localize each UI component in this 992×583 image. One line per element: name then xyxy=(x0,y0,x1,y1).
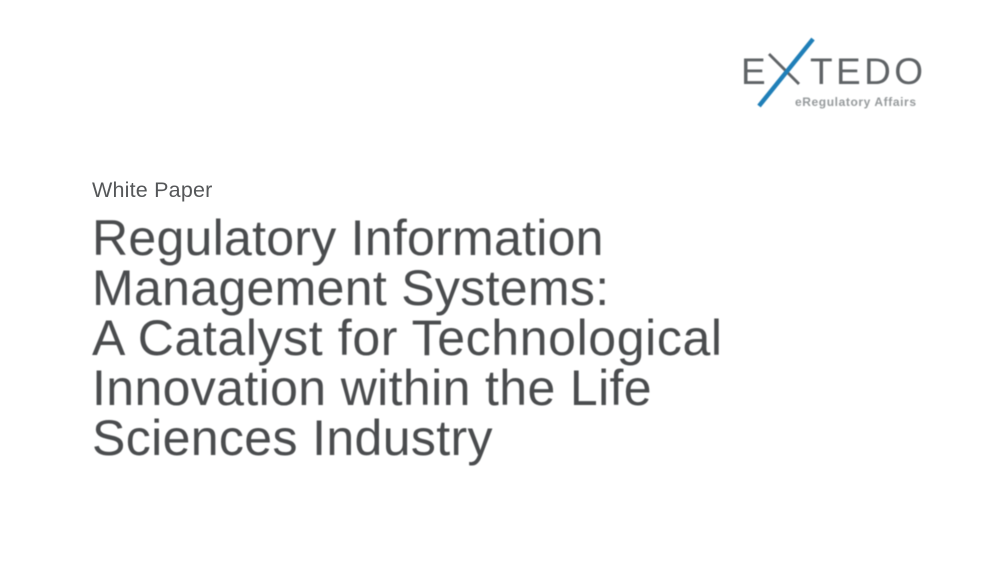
label: White Paper: White Paper xyxy=(92,178,213,202)
title xyxy=(92,210,723,466)
logo tagline: eRegulatory Affairs xyxy=(795,95,916,109)
logo: EXTEDO eRegulatory Affairs xyxy=(741,37,923,109)
title: Innovation within the Life xyxy=(92,360,652,416)
title: Sciences Industry xyxy=(92,410,493,466)
logo X mark xyxy=(759,39,813,106)
title: Regulatory Information xyxy=(92,210,604,266)
title: A Catalyst for Technological xyxy=(92,310,723,366)
logo wordmark letters xyxy=(741,51,923,92)
logo wordmark letters: TEDO xyxy=(810,51,923,92)
title: Management Systems: xyxy=(92,260,609,316)
logo wordmark letters: E xyxy=(741,51,766,92)
